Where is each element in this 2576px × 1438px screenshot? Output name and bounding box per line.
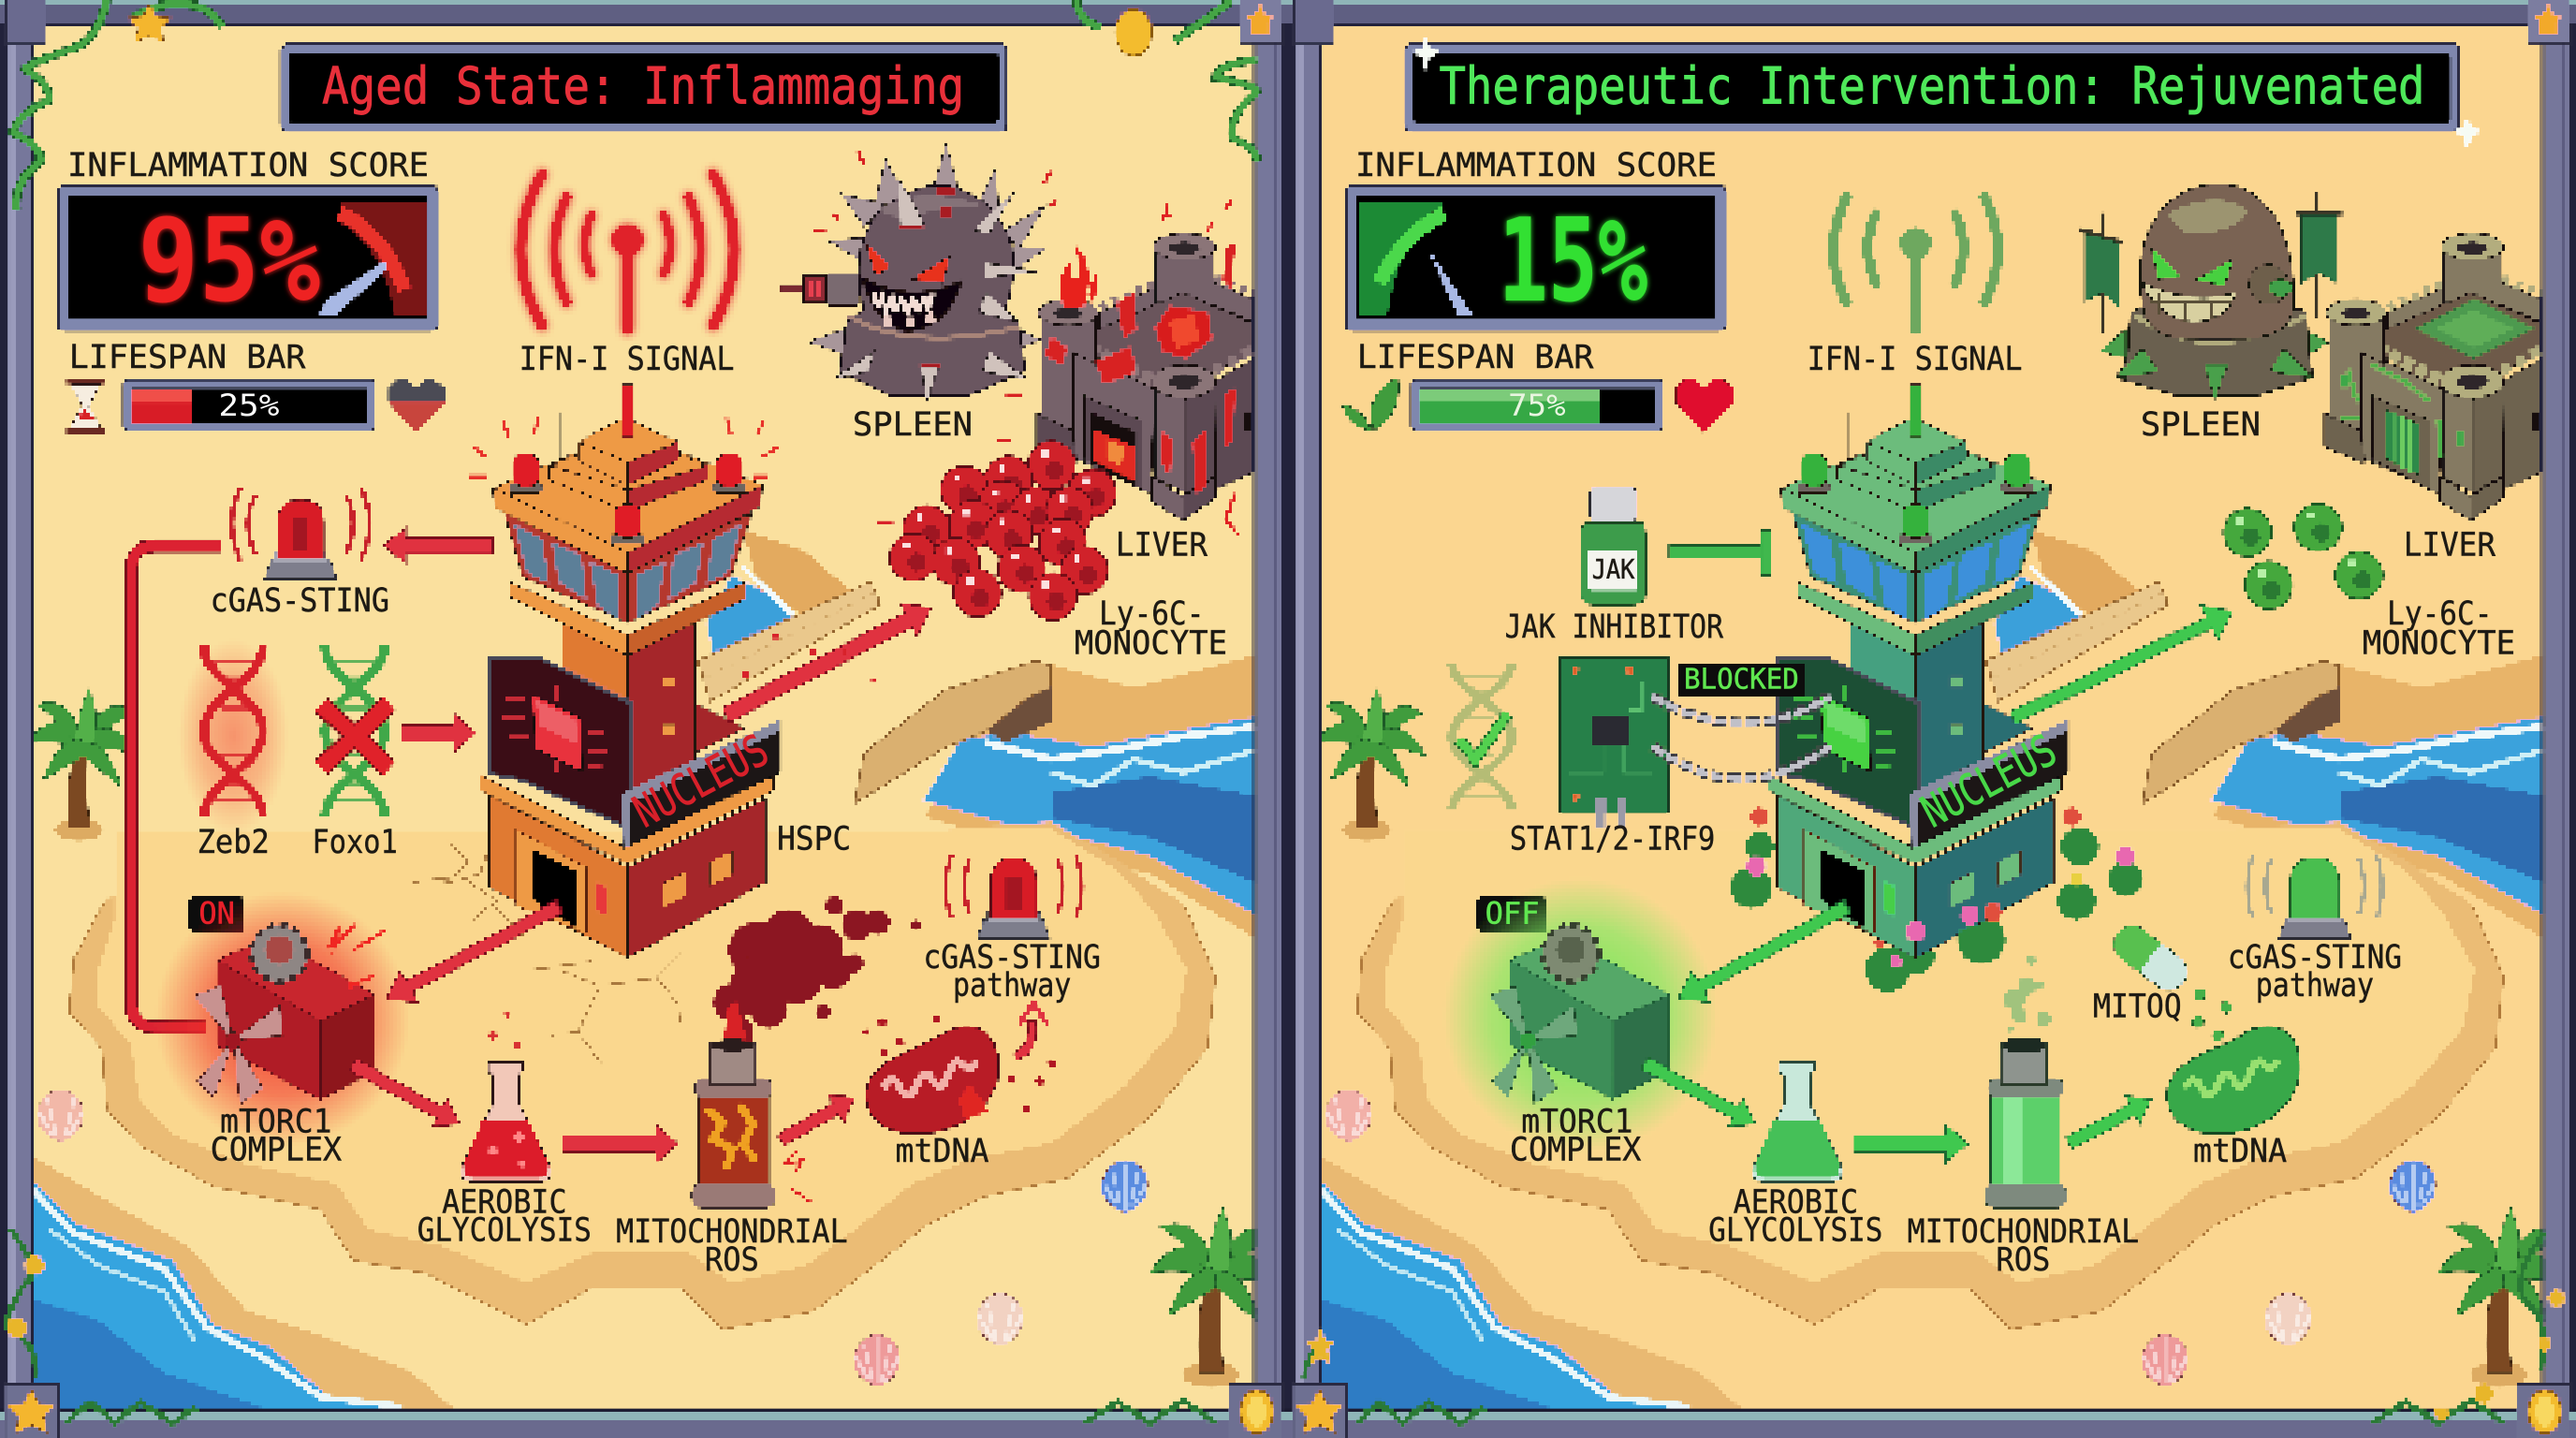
label: aerobic glycolysis: AEROBIC (1734, 1182, 1858, 1221)
chains blocking (1653, 697, 1830, 779)
cracks in the sand (411, 838, 681, 1068)
sign: NUCLEUS: NUCLEUS (1913, 725, 2065, 838)
text layer: aged panel (67, 56, 1227, 1279)
fan (1488, 986, 1577, 1105)
arrow: mTORC1 to glycolysis (1636, 1049, 1764, 1138)
cylinder: mitochondrial ROS (692, 1038, 812, 1208)
label: liver: LIVER (1116, 525, 1208, 564)
arrow: tower to alarm (383, 527, 493, 564)
label: mitochondrial ROS (616, 1212, 848, 1279)
tower: HSPC nucleus (479, 385, 781, 958)
icon: heart full (1676, 379, 1734, 433)
mouth (861, 276, 962, 332)
door lava (1090, 411, 1137, 487)
vial: JAK inhibitor (1580, 487, 1647, 605)
faded DNA (1453, 662, 1512, 811)
badge text: OFF: OFF (1486, 898, 1540, 932)
alarm: cGAS-STING upper (231, 490, 370, 579)
label: Ly-6C monocyte: Ly-6C- (1099, 594, 1204, 633)
inflammation display (1345, 185, 1727, 330)
label: lifespan bar: LIFESPAN BAR (1357, 338, 1594, 376)
alarm: cGAS-STING pathway (945, 857, 1082, 938)
gear (1543, 925, 1599, 981)
shell pink left (37, 1090, 83, 1142)
vial label text: JAK: JAK (1592, 554, 1634, 585)
label: inflammation score: INFLAMMATION SCORE (1355, 146, 1717, 184)
label: inflammation score: INFLAMMATION SCORE (67, 146, 429, 184)
label: cGAS-STING pathway: pathway (953, 966, 1071, 1005)
label: mTORC1 complex (1510, 1102, 1641, 1168)
label: lifespan bar: LIFESPAN BAR (69, 338, 306, 376)
label: Ly-6C monocyte (1075, 594, 1227, 663)
badge: BLOCKED (1677, 662, 1806, 697)
frame (1288, 0, 2576, 1438)
palm tree right (1149, 1208, 1281, 1388)
sign: NUCLEUS: NUCLEUS (625, 725, 777, 838)
monocytes cluster red (889, 441, 1117, 621)
arrow: glycolysis to ROS (562, 1124, 679, 1164)
icon: check core (1459, 713, 1508, 759)
scenery: beach and sea (1288, 0, 2576, 1438)
back spikes (809, 143, 1046, 355)
label: cGAS-STING pathway (2228, 938, 2402, 1005)
mitochondrion healthy (2167, 1026, 2300, 1134)
gene: Zeb2 (178, 638, 289, 835)
label: Ly-6C monocyte: MONOCYTE (2363, 624, 2515, 663)
label: mTORC1 complex: mTORC1 (1521, 1102, 1633, 1140)
spleen monster (781, 143, 1058, 440)
label: mitochondrial ROS: MITOCHONDRIAL (1908, 1212, 2139, 1251)
title: Therapeutic Intervention: Rejuvenated (1439, 56, 2425, 116)
label: Ly-6C monocyte (2363, 594, 2515, 663)
icon: tower beacon sparks (470, 418, 779, 477)
scenery: beach and sea (0, 0, 1288, 1438)
lifespan bar (1412, 379, 1662, 431)
title plate (281, 44, 1007, 131)
label: mitochondrial ROS: MITOCHONDRIAL (616, 1212, 848, 1251)
arrow head and core (1014, 1003, 1048, 1057)
label: HSPC: HSPC (777, 820, 851, 858)
arrow: mTORC1 to glycolysis (345, 1050, 467, 1138)
arrow: tower to mTORC1 (1669, 891, 1855, 1015)
label: mtDNA: mtDNA (2193, 1132, 2287, 1170)
title: Aged State: Inflammaging (322, 56, 964, 116)
panel: therapeutic intervention rejuvenated (1288, 0, 2576, 1438)
mTORC1 complex machine calm (1442, 877, 1719, 1153)
inflammation display (57, 185, 439, 330)
label: aerobic glycolysis: GLYCOLYSIS (1708, 1211, 1882, 1249)
vines and ornaments (1305, 1233, 2565, 1423)
arrow: mtDNA up to pathway (1014, 1019, 1032, 1057)
label: cGAS-STING pathway: cGAS-STING (2228, 938, 2402, 976)
gene: Foxo1 crossed (320, 646, 389, 816)
label: mitochondrial ROS (1908, 1212, 2139, 1279)
flowers around tower (1730, 807, 2144, 992)
red sparks (812, 151, 1058, 440)
arrow: ROS to mtDNA (772, 1083, 862, 1154)
label: spleen: SPLEEN (853, 405, 973, 444)
flask: aerobic glycolysis (1752, 1062, 1842, 1181)
banners (2080, 191, 2343, 333)
board: STAT1/2-IRF9 (1559, 657, 1669, 829)
palm tree left (1314, 689, 1426, 842)
gauge (320, 204, 426, 315)
badge text: BLOCKED: BLOCKED (1684, 664, 1799, 697)
mitochondrion damaged (862, 1014, 1057, 1134)
flask: aerobic glycolysis (461, 1010, 551, 1181)
eyes (866, 243, 890, 276)
mTORC1 complex machine (154, 890, 411, 1147)
label: MitoQ: MITOQ (2093, 988, 2182, 1026)
fan (194, 986, 283, 1105)
label: JAK inhibitor: JAK INHIBITOR (1505, 608, 1724, 646)
label: Zeb2: Zeb2 (198, 823, 270, 861)
badge: ON (189, 896, 245, 933)
icon: IFN-I signal red (520, 174, 735, 329)
label: mitochondrial ROS: ROS (705, 1240, 759, 1279)
green vapour (2002, 954, 2052, 1033)
label: mTORC1 complex: mTORC1 (220, 1102, 332, 1140)
badge text: ON: ON (198, 898, 235, 932)
icon: hourglass (66, 378, 105, 433)
monocytes few (2224, 504, 2383, 609)
smoke cloud (713, 896, 921, 1051)
value: 95 percent: 95% (138, 194, 320, 328)
lava on walls (1045, 243, 1236, 493)
label: spleen: SPLEEN (2141, 405, 2261, 444)
arrow: ROS to mtDNA (2060, 1085, 2159, 1158)
shell white (2265, 1293, 2311, 1346)
label: STAT1/2-IRF9: STAT1/2-IRF9 (1510, 820, 1715, 858)
panel: aged state inflammaging (0, 0, 1288, 1438)
gun (781, 272, 859, 306)
shell blue (1102, 1160, 1148, 1212)
shell pink left (1325, 1090, 1371, 1142)
arrow: tower to monocytes (2004, 594, 2241, 736)
shell white (977, 1293, 1023, 1346)
sparkles (1410, 37, 2484, 154)
castle: liver restored (2324, 233, 2541, 521)
flames (1060, 243, 1099, 309)
shell coral (2142, 1334, 2188, 1387)
front flowers (1906, 903, 2002, 953)
body (840, 185, 1025, 396)
spleen guardian (2080, 184, 2343, 400)
label: cGAS-STING pathway (923, 938, 1101, 1005)
label: mtDNA: mtDNA (896, 1132, 989, 1170)
frame (0, 0, 1288, 1438)
palm tree left (26, 689, 138, 842)
label: IFN-I signal: IFN-I SIGNAL (520, 340, 735, 378)
arrow: tower to monocytes (717, 591, 941, 732)
icon: heart fading (388, 379, 446, 433)
text layer: rejuvenated panel (1355, 56, 2515, 1279)
shell blue (2390, 1160, 2436, 1212)
particles near arrow (742, 520, 894, 683)
label: aerobic glycolysis (1708, 1182, 1882, 1249)
value: 15 percent: 15% (1499, 194, 1647, 328)
gear (252, 925, 307, 981)
shell coral (854, 1334, 900, 1387)
front spikes (833, 178, 1038, 403)
label: Foxo1: Foxo1 (312, 823, 398, 861)
label: IFN-I signal: IFN-I SIGNAL (1808, 340, 2023, 378)
label: cGAS-STING: cGAS-STING (211, 581, 389, 620)
lifespan bar (124, 379, 374, 431)
title plate (1405, 44, 2459, 131)
arrow: genes to chip (401, 713, 476, 753)
icon: leaf sprout (1342, 378, 1398, 431)
label: Ly-6C monocyte: Ly-6C- (2387, 594, 2492, 633)
icon: check mark (1459, 713, 1508, 759)
label: mTORC1 complex: COMPLEX (1510, 1130, 1641, 1168)
label: mTORC1 complex: COMPLEX (211, 1130, 342, 1168)
value: 75 percent: 75% (1508, 389, 1566, 423)
label: mTORC1 complex (211, 1102, 342, 1168)
pipe: feedback loop (131, 546, 222, 1027)
value: 25 percent: 25% (218, 389, 279, 423)
label: mitochondrial ROS: ROS (1996, 1240, 2050, 1279)
cylinder: mitochondrial ROS clean (1984, 1037, 2067, 1208)
lava on roof (1155, 306, 1212, 359)
castle: liver burning (1036, 200, 1253, 536)
label: aerobic glycolysis: GLYCOLYSIS (417, 1211, 592, 1249)
badge: OFF (1477, 896, 1547, 933)
palm tree right (2437, 1208, 2569, 1388)
label: liver: LIVER (2404, 525, 2496, 564)
arrow: glycolysis to ROS (1853, 1124, 1969, 1164)
arrow: tower to mTORC1 (377, 891, 567, 1015)
gauge (1358, 204, 1472, 315)
vines and ornaments (7, 0, 1257, 1423)
label: aerobic glycolysis: AEROBIC (442, 1182, 567, 1221)
label: cGAS-STING pathway: cGAS-STING (923, 938, 1101, 976)
inhibition bar (1669, 531, 1771, 575)
label: aerobic glycolysis (417, 1182, 592, 1249)
drops (2192, 989, 2232, 1041)
icon: IFN-I signal calm (1834, 198, 1998, 329)
label: cGAS-STING pathway: pathway (2256, 966, 2374, 1005)
label: Ly-6C monocyte: MONOCYTE (1075, 624, 1227, 663)
alarm: cGAS-STING pathway off (2247, 857, 2382, 938)
tower: HSPC nucleus (1767, 385, 2069, 958)
capsule: MitoQ (2107, 919, 2194, 997)
